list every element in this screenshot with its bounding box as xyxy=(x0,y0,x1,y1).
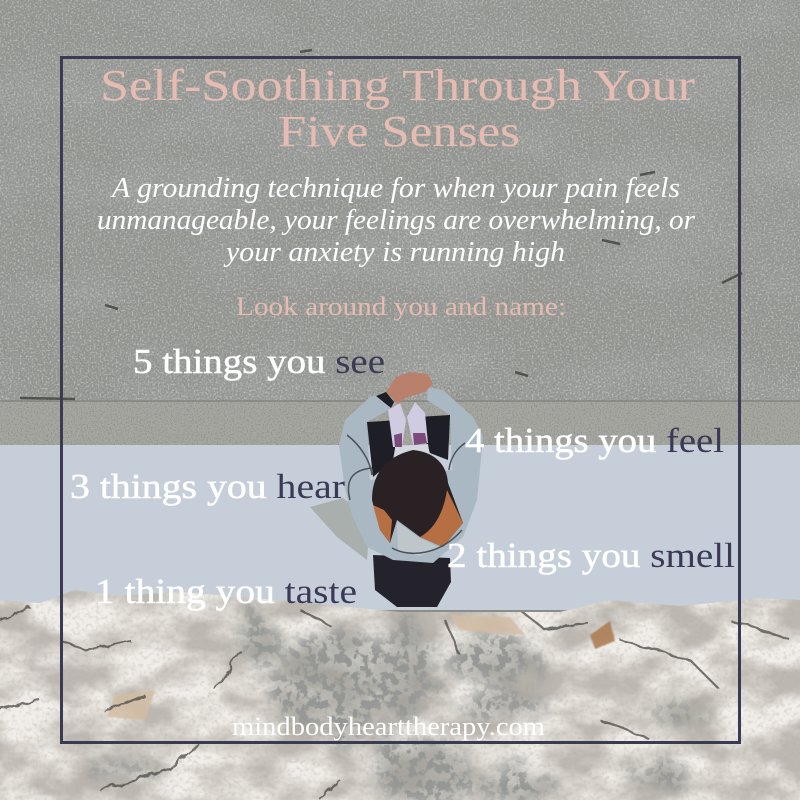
title xyxy=(100,61,695,156)
frame xyxy=(62,58,740,742)
sense: feel: 4 things you feel xyxy=(465,421,724,460)
sense: taste: 1 thing you taste xyxy=(95,572,357,611)
hair orange tips xyxy=(373,490,463,547)
subtitle xyxy=(97,173,695,268)
subtitle: A grounding technique for when your pain feels xyxy=(110,173,680,204)
shoes xyxy=(388,403,406,447)
sleeve cuff xyxy=(376,392,394,408)
sense: hear: 3 things you hear xyxy=(70,467,345,506)
photo: person sitting on ledge xyxy=(310,372,483,607)
crumpled fabric xyxy=(310,498,370,560)
website: mindbodyhearttherapy.com xyxy=(232,712,545,741)
title: Self-Soothing Through Your xyxy=(100,61,695,110)
sense: see: 5 things you see xyxy=(133,342,385,381)
subtitle: your anxiety is running high xyxy=(223,237,565,268)
sense: smell: 2 things you smell xyxy=(447,536,735,575)
shoe pattern xyxy=(394,433,427,447)
background: rocks xyxy=(0,590,800,800)
hands xyxy=(386,372,433,404)
ledge gap xyxy=(395,444,430,462)
hair xyxy=(372,450,463,547)
lichen patches xyxy=(80,598,718,800)
jacket xyxy=(339,387,483,563)
subtitle: unmanageable, your feelings are overwhelming, or xyxy=(97,205,695,236)
jacket collar xyxy=(397,522,440,556)
dark trousers under body xyxy=(373,555,451,607)
dark trouser legs xyxy=(367,420,400,477)
background: painted white ledge xyxy=(0,445,800,610)
jacket seams xyxy=(347,435,465,553)
rock cracks xyxy=(0,607,790,800)
prompt: Look around you and name: xyxy=(236,292,566,321)
warm rock stains xyxy=(107,615,615,720)
title: Five Senses xyxy=(278,107,520,156)
background: concrete wall xyxy=(0,0,800,446)
